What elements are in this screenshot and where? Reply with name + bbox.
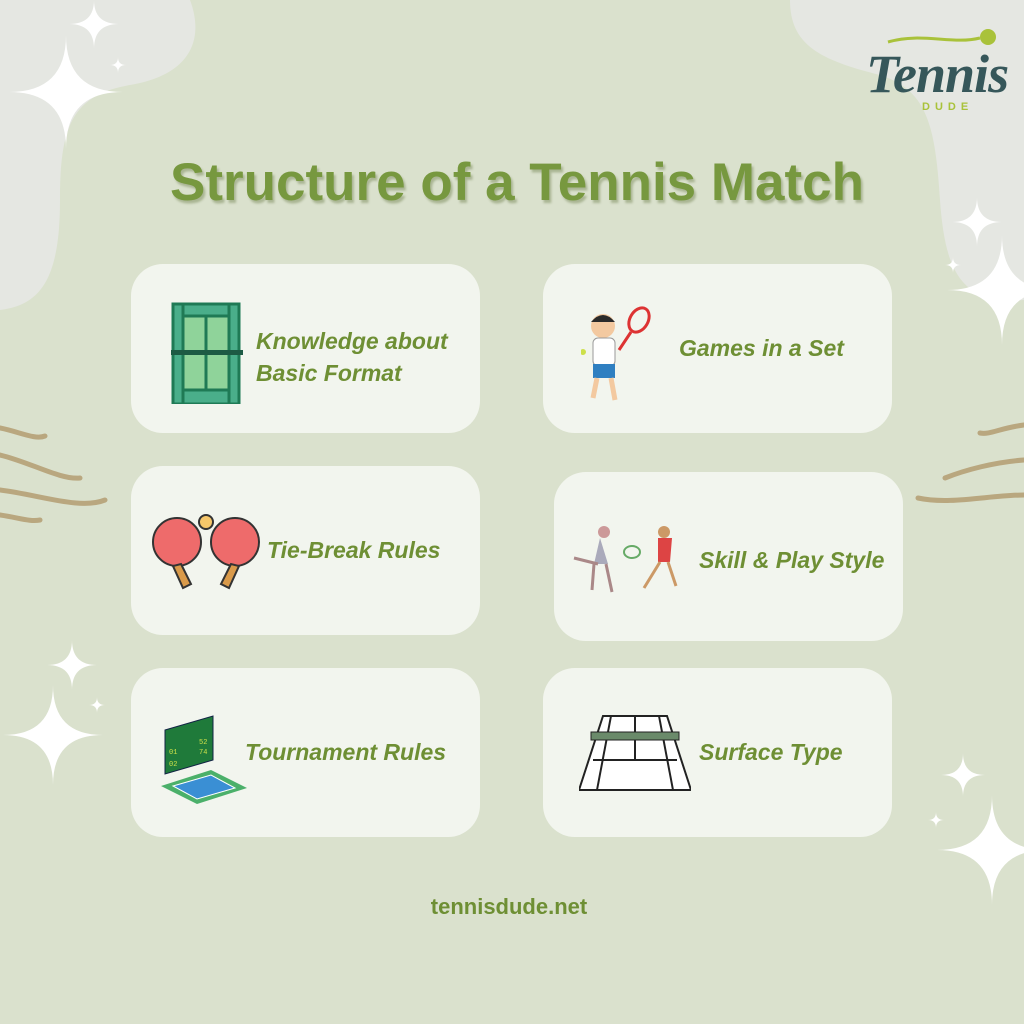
card: surface type (543, 668, 892, 837)
label: Knowledge about (256, 328, 448, 354)
icon: scoreboard (161, 715, 247, 804)
footer url: tennisdude.net (431, 894, 587, 919)
icon: scoreboard: 01 (169, 749, 177, 757)
icon: tennis court (171, 302, 243, 404)
label: Surface Type (699, 739, 843, 765)
label: Games in a Set (679, 335, 844, 361)
label: Skill & Play Style (699, 547, 884, 573)
icon: paddles (152, 514, 260, 590)
title: Structure of a Tennis Match (170, 153, 864, 212)
label (256, 328, 448, 386)
card: tie-break (131, 466, 480, 635)
card: skill & play style (554, 472, 903, 641)
logo: DUDE (922, 101, 973, 113)
logo: Tennis (866, 44, 1008, 104)
icon: scoreboard: 52 (199, 739, 207, 747)
card: basic format (131, 264, 480, 433)
icon: tennis player (581, 306, 651, 400)
icon: two players (574, 526, 678, 592)
icon: scoreboard: 74 (199, 749, 207, 757)
card: games in a set (543, 264, 892, 433)
label: Tournament Rules (245, 739, 446, 765)
label: Basic Format (256, 360, 402, 386)
icon: scoreboard: 02 (169, 761, 177, 769)
icon: court perspective (579, 715, 691, 791)
label: Tie-Break Rules (267, 537, 440, 563)
card: tournament rules (131, 668, 480, 837)
